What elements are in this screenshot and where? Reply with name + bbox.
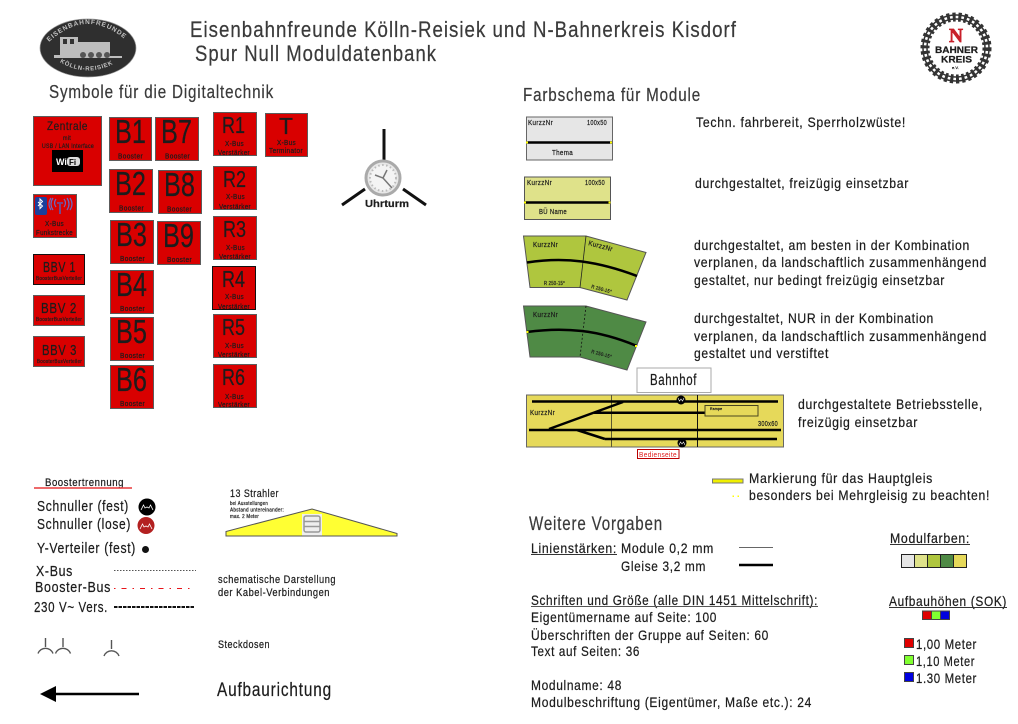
legend: Aufbauhöhen bbox=[889, 593, 1007, 686]
symbol: X-Bus Verstärker R3: Verstärker bbox=[219, 252, 251, 261]
text: Schriften und Größe: Text auf Seiten: 36 bbox=[531, 643, 640, 659]
symbol: BBV 2: BoosterBusVerteiler bbox=[36, 317, 82, 323]
symbol: Strahler: max. 2 Meter bbox=[230, 514, 259, 520]
symbol: Booster B4: Booster bbox=[120, 304, 145, 313]
symbol: Strahler: 13 Strahler bbox=[230, 488, 279, 500]
legend: Schnuller fest: Schnuller (fest) bbox=[37, 498, 129, 515]
symbol: Strahler: Abstand untereinander: bbox=[230, 508, 284, 514]
symbol: Booster B7: Booster bbox=[165, 152, 190, 160]
symbol: Booster B7: B7 bbox=[161, 113, 192, 150]
symbol: Strahler: bei Ausstellungen bbox=[230, 501, 268, 507]
module: curved hellgrün: R 250-15° bbox=[544, 281, 565, 287]
logo: Eisenbahnfreunde Kölln-Reisiek bbox=[40, 18, 136, 78]
symbol: BBV 2: BBV 2 bbox=[41, 300, 77, 317]
logo: N-Bahnerkreis bbox=[923, 15, 989, 81]
symbol: Zentrale: Zentrale bbox=[47, 119, 88, 133]
symbol: X-Bus Verstärker R5 bbox=[214, 314, 256, 359]
symbol: Booster B1 bbox=[110, 113, 152, 160]
module: freizügig einsetzbar: BÜ Name bbox=[539, 208, 567, 216]
text: NUR in der Kombination: gestaltet und verstiftet bbox=[694, 345, 829, 361]
symbol: Booster B9: Booster bbox=[167, 255, 192, 264]
symbol: X-Bus Terminator T: X-Bus bbox=[277, 138, 296, 147]
symbol: X-Bus Verstärker R4: R4 bbox=[222, 266, 245, 292]
symbol: BBV 1 bbox=[34, 254, 84, 284]
symbol: Booster B8 bbox=[158, 166, 202, 214]
symbol: Booster B7 bbox=[156, 113, 198, 160]
symbol: X-Bus Terminator T: T bbox=[279, 113, 293, 139]
label: Bahnhof bbox=[637, 368, 711, 392]
symbol: Booster B6 bbox=[110, 361, 154, 408]
symbol: X-Bus Verstärker R1: Verstärker bbox=[218, 148, 250, 157]
logo: Eisenbahnfreunde Kölln-Reisiek: KÖLLN-REISIEK bbox=[60, 58, 113, 70]
legend: Modulfarben bbox=[890, 530, 970, 568]
symbol: BBV 1: BBV 1 bbox=[43, 259, 76, 276]
title: Eisenbahnfreunde Kölln-Reisiek und N-Bahnerkreis Kisdorf bbox=[190, 17, 737, 42]
legend: Aufbauhöhen: 1,10 Meter bbox=[916, 653, 975, 669]
symbol: X-Bus Verstärker R2: Verstärker bbox=[219, 202, 251, 211]
legend: X-Bus: X-Bus bbox=[36, 563, 73, 580]
legend: Hauptgleis-Markierung bbox=[712, 470, 990, 503]
symbol: Booster B9: B9 bbox=[163, 217, 194, 254]
text: durchgestaltet, freizügig: durchgestaltet, freizügig einsetzbar bbox=[695, 175, 909, 191]
label: Bedienseite: Bedienseite bbox=[639, 450, 677, 459]
heading: Weitere Vorgaben: Weitere Vorgaben bbox=[529, 514, 663, 535]
module: freizügig einsetzbar: KurzzNr bbox=[527, 180, 552, 187]
symbol: X-Bus Verstärker R3: X-Bus bbox=[226, 243, 245, 252]
text: Linienstärken: Gleise 3,2 mm bbox=[621, 558, 706, 574]
symbol: Zentrale: Fi bbox=[69, 158, 76, 167]
symbol: Zentrale bbox=[34, 116, 102, 186]
symbol: Booster B4: B4 bbox=[116, 266, 147, 303]
symbol: X-Bus Funkstrecke: Funkstrecke bbox=[36, 228, 73, 237]
module: curved hellgrün: KurzzNr bbox=[587, 240, 614, 253]
symbol: X-Bus Terminator T: Terminator bbox=[269, 146, 303, 155]
heading: Boostertrennung: Boostertrennung bbox=[45, 477, 124, 489]
symbol: Strahler bbox=[226, 488, 397, 536]
legend: 230 V Versorgung: 230 V~ Vers. bbox=[34, 599, 108, 616]
legend: Aufbauhöhen: 1.30 Meter bbox=[916, 670, 977, 686]
logo: N-Bahnerkreis: N bbox=[949, 25, 964, 47]
symbol: X-Bus Verstärker R1: R1 bbox=[222, 112, 245, 138]
symbol: Booster B1: B1 bbox=[115, 113, 146, 150]
logo: N-Bahnerkreis: KREIS bbox=[941, 54, 972, 66]
logo: N-Bahnerkreis: e.V. bbox=[952, 65, 959, 70]
text: durchgestaltet Kombination bbox=[694, 237, 987, 288]
symbol: X-Bus Verstärker R3: R3 bbox=[223, 216, 246, 242]
legend: Schnuller lose: Schnuller (lose) bbox=[37, 516, 131, 533]
symbol: X-Bus Verstärker R2 bbox=[214, 166, 256, 211]
legend: Hauptgleis-Markierung: Markierung für das Hauptgleis bbox=[749, 470, 933, 486]
logo: Eisenbahnfreunde Kölln-Reisiek: EISENBAHNFREUNDE bbox=[46, 20, 126, 42]
symbol: X-Bus Verstärker R1: X-Bus bbox=[225, 139, 244, 148]
module: technisch fahrbereit: Thema bbox=[552, 150, 573, 157]
symbol: Uhrturm: Uhrturm bbox=[365, 199, 409, 210]
text: Schriften und Größe: Überschriften der Gruppe auf Seiten: 60 bbox=[531, 626, 769, 643]
title: Spur Null Moduldatenbank bbox=[195, 41, 437, 66]
symbol: Booster B5 bbox=[110, 313, 154, 360]
module: Betriebsstelle bbox=[526, 395, 784, 448]
module: freizügig einsetzbar: 100x50 bbox=[585, 180, 605, 187]
heading: Symbole: Symbole für die Digitaltechnik bbox=[49, 81, 274, 102]
symbol: X-Bus Verstärker R5: R5 bbox=[222, 314, 245, 340]
text: schematische Darstellung bbox=[218, 574, 336, 599]
symbol: X-Bus Verstärker R6: R6 bbox=[222, 364, 245, 390]
legend: Hauptgleis-Markierung: besonders bei Mehrgleisig zu beachten! bbox=[749, 487, 990, 503]
symbol: X-Bus Verstärker R3 bbox=[214, 216, 256, 261]
text: durchgestaltet Kombination: gestaltet, nur bedingt freizügig einsetzbar bbox=[694, 272, 945, 288]
legend: Modulfarben: Modulfarben: bbox=[890, 530, 970, 546]
symbol: Booster B3: Booster bbox=[120, 254, 145, 263]
symbol: BBV 2 bbox=[34, 296, 84, 326]
module: curved dunkelgrün: KurzzNr bbox=[533, 312, 558, 319]
symbol: Uhrturm bbox=[342, 129, 426, 210]
text: Schriften und Größe bbox=[531, 592, 818, 710]
symbol: X-Bus Verstärker R1 bbox=[214, 112, 256, 157]
text: Schriften und Größe: Schriften und Größe (alle DIN 1451 Mittelschrift): bbox=[531, 592, 818, 608]
module: Betriebsstelle: 300x60 bbox=[758, 421, 778, 428]
title bbox=[190, 17, 737, 66]
text: NUR in der Kombination bbox=[694, 310, 987, 361]
text: Betriebsstelle bbox=[798, 396, 983, 430]
text: durchgestaltet Kombination: durchgestaltet, am besten in der Kombination bbox=[694, 237, 970, 253]
symbol: BBV 1: BoosterBusVerteiler bbox=[36, 276, 82, 282]
module: curved dunkelgrün: R 250-15° bbox=[590, 349, 612, 360]
module: freizügig einsetzbar bbox=[524, 177, 610, 220]
text: NUR in der Kombination: durchgestaltet, NUR in der Kombination bbox=[694, 310, 934, 326]
heading: Farbschema: Farbschema für Module bbox=[523, 84, 701, 105]
module: Betriebsstelle: KurzzNr bbox=[530, 410, 555, 417]
symbol: X-Bus Verstärker R4: Verstärker bbox=[218, 302, 250, 311]
label: Bahnhof: Bahnhof bbox=[650, 372, 697, 389]
symbol: Booster B6: Booster bbox=[120, 399, 145, 408]
module: technisch fahrbereit: KurzzNr bbox=[528, 120, 553, 127]
module: curved hellgrün: R 250-15° bbox=[590, 284, 612, 295]
text: Betriebsstelle: durchgestaltete Betriebsstelle, bbox=[798, 396, 983, 412]
symbol: X-Bus Verstärker R5: Verstärker bbox=[218, 350, 250, 359]
icon: Steckdosen bbox=[38, 638, 119, 656]
symbol: Booster B2: B2 bbox=[115, 165, 146, 202]
symbol: X-Bus Verstärker R5: X-Bus bbox=[225, 341, 244, 350]
text: Linienstärken: Linienstärken: bbox=[531, 540, 617, 556]
symbol: Booster B2 bbox=[110, 165, 152, 212]
module: technisch fahrbereit: 100x50 bbox=[587, 120, 607, 127]
text: schematische Darstellung: schematische Darstellung bbox=[218, 574, 336, 586]
module: curved hellgrün: KurzzNr bbox=[533, 242, 558, 249]
symbol: Booster B5: B5 bbox=[116, 313, 147, 350]
legend: Booster-Bus: Booster-Bus bbox=[35, 579, 111, 596]
legend: Aufbauhöhen: 1,00 Meter bbox=[916, 636, 977, 652]
text: Schriften und Größe: Eigentümername auf Seite: 100 bbox=[531, 609, 717, 625]
symbol: X-Bus Verstärker R6 bbox=[214, 364, 256, 409]
symbol: Booster B6: B6 bbox=[116, 361, 147, 398]
text: Techn. fahrbereit: Techn. fahrbereit, Sperrholzwüste! bbox=[696, 114, 906, 130]
symbol: Zentrale: Wi bbox=[56, 157, 67, 167]
text: Steckdosen: Steckdosen bbox=[218, 639, 270, 651]
symbol: Booster B3 bbox=[110, 216, 154, 264]
text: Linienstärken: Module 0,2 mm bbox=[621, 540, 714, 556]
symbol: Zentrale: mit bbox=[63, 136, 71, 142]
symbol: Booster B3: B3 bbox=[116, 216, 147, 253]
symbol: X-Bus Verstärker R2: X-Bus bbox=[226, 192, 245, 201]
logo: N-Bahnerkreis: BAHNER bbox=[935, 45, 978, 56]
text: Schriften und Größe: Modulbeschriftung (Eigentümer, Maße etc.): 24 bbox=[531, 694, 812, 710]
symbol: X-Bus Terminator T bbox=[266, 113, 308, 156]
text: schematische Darstellung: der Kabel-Verbindungen bbox=[218, 587, 330, 599]
text: Linienstärken bbox=[531, 540, 773, 574]
module: curved hellgrün bbox=[524, 236, 646, 300]
module: technisch fahrbereit bbox=[526, 117, 612, 160]
symbol: Booster B8: B8 bbox=[164, 166, 195, 203]
symbol: Zentrale: USB / LAN Interface bbox=[42, 144, 94, 150]
text: Aufbaurichtung: Aufbaurichtung bbox=[217, 680, 332, 701]
symbol: X-Bus Verstärker R4 bbox=[212, 266, 256, 311]
symbol: Booster B5: Booster bbox=[120, 351, 145, 360]
symbol: X-Bus Funkstrecke bbox=[34, 194, 76, 238]
arrow: Aufbaurichtung bbox=[40, 686, 139, 702]
module: Betriebsstelle: Rampe bbox=[710, 407, 722, 411]
text: Betriebsstelle: freizügig einsetzbar bbox=[798, 414, 918, 430]
symbol: Booster B2: Booster bbox=[119, 204, 144, 212]
symbol: Booster B4 bbox=[110, 266, 154, 314]
module: curved dunkelgrün bbox=[524, 306, 646, 370]
symbol: BBV 3 bbox=[34, 336, 84, 366]
symbol: Booster B1: Booster bbox=[118, 152, 143, 160]
symbol: BBV 3: BoosterBusVerteiler bbox=[37, 359, 82, 365]
symbol: Booster B8: Booster bbox=[167, 204, 192, 214]
symbol: X-Bus Verstärker R4: X-Bus bbox=[225, 292, 244, 301]
symbol: X-Bus Verstärker R6: Verstärker bbox=[218, 400, 250, 409]
symbol: X-Bus Verstärker R6: X-Bus bbox=[225, 392, 244, 401]
text: Schriften und Größe: Modulname: 48 bbox=[531, 677, 622, 693]
symbol: X-Bus Funkstrecke: X-Bus bbox=[45, 219, 64, 228]
symbol: Booster B9 bbox=[158, 217, 200, 264]
symbol: BBV 3: BBV 3 bbox=[42, 342, 77, 359]
legend: Y-Verteiler: Y-Verteiler (fest) bbox=[37, 540, 136, 557]
symbol: X-Bus Verstärker R2: R2 bbox=[223, 166, 246, 192]
